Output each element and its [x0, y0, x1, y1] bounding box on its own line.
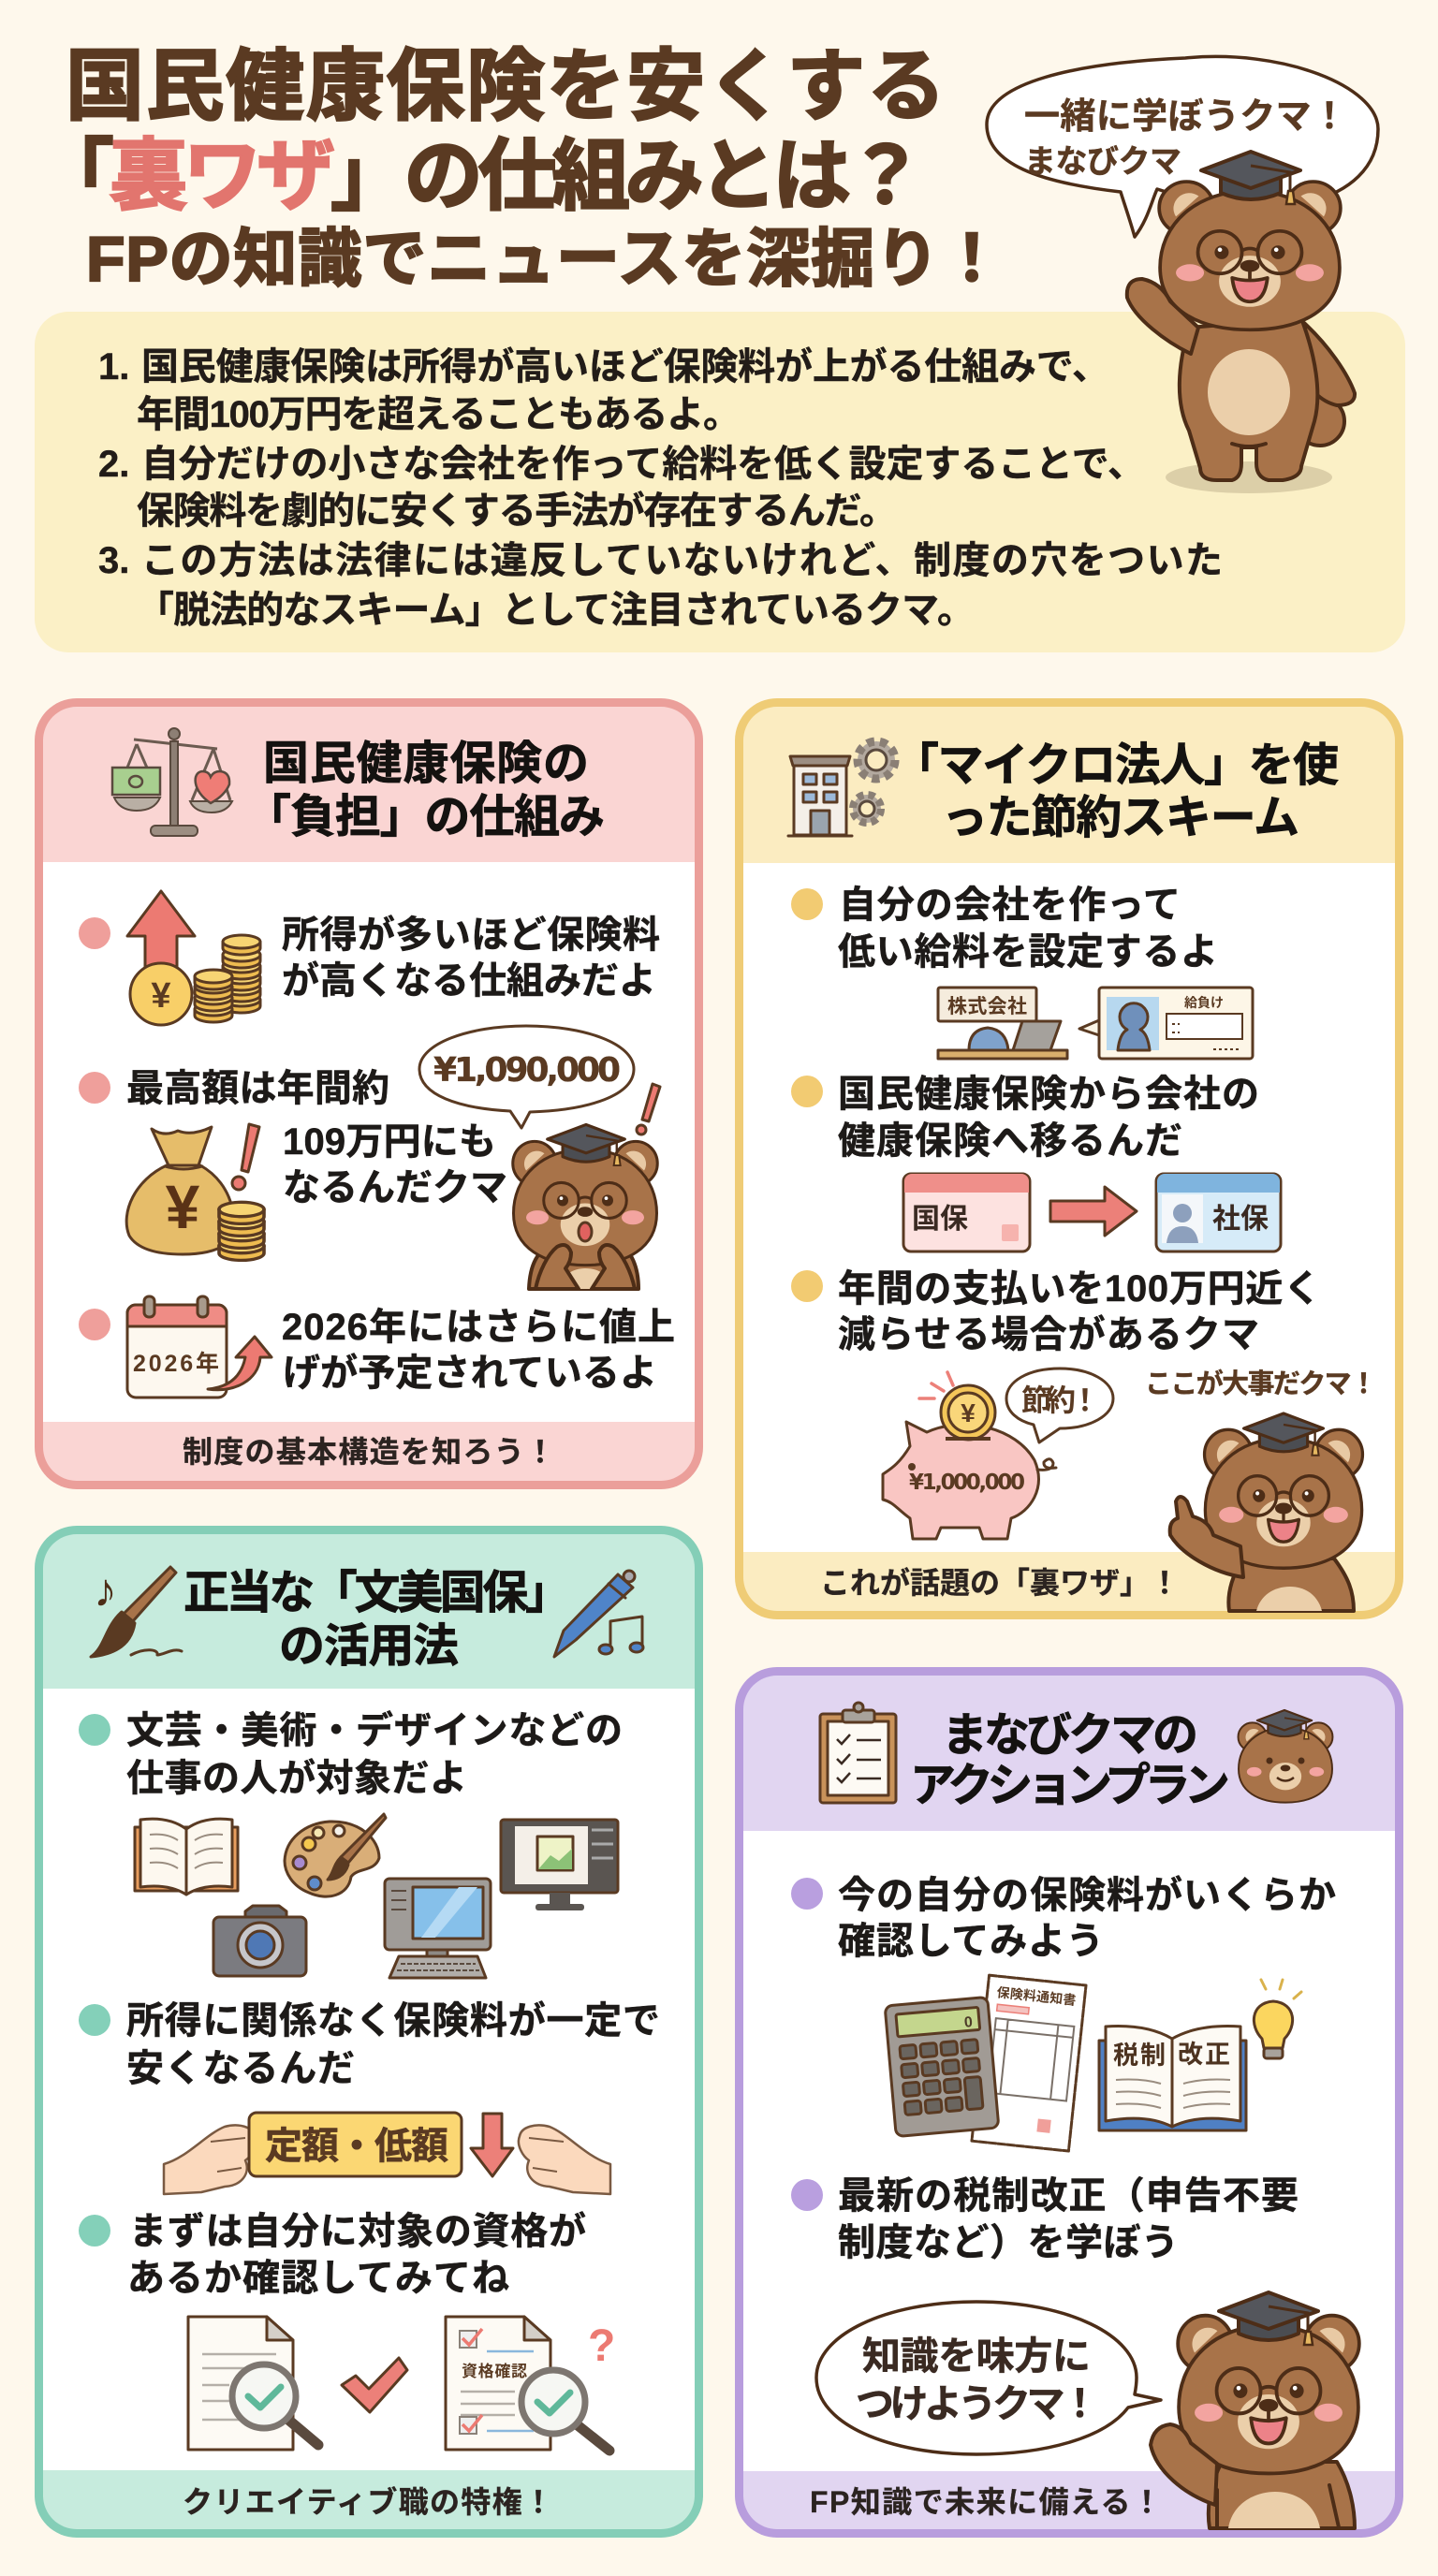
heading: まなびクマの [942, 1710, 1198, 1761]
mascot: surprised bear [513, 1124, 657, 1289]
icon: salary card: 給負け [1184, 995, 1224, 1010]
bullet 1: 今の自分の保険料がいくらか [838, 1875, 1336, 1916]
heading: 「負担」の仕組み [245, 792, 605, 842]
bullet 3: 年間の支払いを100万円近く [838, 1268, 1321, 1310]
speech bubble: ¥1,090,000 [419, 1026, 634, 1128]
icon: money bag: ¥ [166, 1172, 200, 1241]
summary box [35, 312, 1405, 652]
footer: クリエイティブ職の特権！ [183, 2485, 553, 2519]
icon: tax reform book [1099, 2027, 1246, 2130]
bullet 2 [791, 2175, 1299, 2263]
speech bubble: 知識を味方に: つけようクマ！ [856, 2382, 1099, 2425]
bullet 1: 所得が多いほど保険料 [282, 915, 660, 956]
bullet 3 [79, 1307, 675, 1394]
title: 「裏ワザ」の仕組みとは？ [36, 132, 925, 220]
bullet 3: げが予定されているよ [283, 1353, 657, 1394]
arrow [1050, 1187, 1137, 1236]
footer: 制度の基本構造を知ろう！ [183, 1435, 555, 1469]
icon: hands with sign: 定額・低額 [265, 2126, 448, 2167]
footer: FP知識で未来に備える！ [810, 2485, 1162, 2519]
icon: rising arrow and coins: ¥ [151, 976, 171, 1016]
bullet 3 [791, 1268, 1321, 1355]
icon: camera [213, 1906, 306, 1976]
heading: 正当な「文美国保」 [183, 1568, 571, 1618]
icon: light bulb [1254, 1980, 1301, 2058]
icon: music note and brush: ♪ [94, 1564, 117, 1617]
bullet 1: が高くなる仕組みだよ [282, 960, 656, 1002]
title [36, 42, 1004, 295]
panel: マイクロ法人 [735, 698, 1403, 1619]
icon: check mark [342, 2358, 407, 2412]
mascot: bear with speech [1151, 2292, 1359, 2528]
bullet 1: 自分の会社を作って [839, 885, 1181, 926]
bullet 1 [791, 885, 1218, 973]
bullet 2 [79, 1068, 507, 1208]
bullet 2: 所得に関係なく保険料が一定で [126, 2000, 660, 2042]
bullet 1: 文芸・美術・デザインなどの [126, 1709, 623, 1751]
panel: アクションプラン [735, 1667, 1403, 2538]
speech bubble: 知識を味方に: 知識を味方に [862, 2334, 1091, 2378]
summary list: 国民健康保険は所得が高いほど保険料が上がる仕組みで、 [141, 346, 1109, 388]
bullet 2: 制度など）を学ぼう [838, 2222, 1179, 2263]
icon: 社保 card [1156, 1174, 1281, 1251]
summary list: 「脱法的なスキーム」として注目されているクマ。 [137, 590, 975, 631]
icon: building and gears [788, 741, 895, 836]
icon: piggy bank: ¥1,000,000 [909, 1471, 1025, 1495]
icon: checklist with magnifier [446, 2317, 615, 2451]
icon: money bag [126, 1124, 264, 1260]
icon: checklist with magnifier: ? [588, 2321, 615, 2371]
mascot: waving bear [1127, 152, 1355, 493]
icon: 国保 card [903, 1174, 1030, 1251]
bullet 1: 確認してみよう [838, 1921, 1104, 1962]
icon: calendar 2026 [127, 1296, 271, 1398]
bullet 1 [79, 1709, 623, 1799]
icon: palette [285, 1814, 386, 1896]
icon: salary card [1079, 988, 1253, 1059]
title: FPの知識でニュースを深掘り！ [86, 224, 1004, 295]
bullet 1 [791, 1875, 1336, 1962]
bullet 2 [79, 2000, 660, 2089]
icon: pen and music notes [554, 1571, 643, 1657]
icon: 社保 card: 社保 [1212, 1204, 1269, 1235]
icon: tax reform book: 改正 [1178, 2041, 1230, 2069]
speech bubble: 節約: 節約！ [1021, 1383, 1100, 1417]
bullet 3: あるか確認してみてね [127, 2258, 509, 2299]
summary list [98, 346, 1223, 631]
heading: アクションプラン [910, 1761, 1230, 1811]
heading [183, 1568, 571, 1672]
bullet 2: なるんだクマ [283, 1167, 507, 1208]
icon: small bear head [1239, 1710, 1332, 1803]
summary list: 自分だけの小さな会社を作って給料を低く設定することで、 [141, 444, 1145, 485]
icon: document with magnifier [188, 2317, 318, 2450]
heading: った節約スキーム [942, 793, 1299, 843]
heading [245, 739, 605, 842]
title: 国民健康保険を安くする [66, 42, 946, 130]
panel: 文美国保 [35, 1526, 703, 2538]
icon: notice paper: 保険料通知書 [996, 1984, 1077, 2008]
icon: piggy bank [883, 1372, 1056, 1539]
bullet 2: 健康保険へ移るんだ [838, 1120, 1182, 1162]
heading: 「マイクロ法人」を使 [893, 740, 1339, 791]
bullet 2 [791, 1074, 1259, 1162]
summary list: 年間100万円を超えることもあるよ。 [137, 394, 741, 435]
icon: design monitor [501, 1820, 618, 1910]
speech bubble: 節約 [1006, 1368, 1113, 1442]
icon: hands with sign [164, 2113, 610, 2194]
icon: calculator [885, 1997, 999, 2137]
footer: これが話題の「裏ワザ」！ [820, 1566, 1180, 1600]
icon: desktop computer [385, 1879, 491, 1978]
speech bubble: 知識を味方に [816, 2302, 1161, 2454]
summary list: 2. [98, 444, 129, 485]
bullet 2: 最高額は年間約 [126, 1068, 389, 1109]
icon: open book [135, 1819, 238, 1895]
icon: clipboard [820, 1703, 896, 1803]
speech bubble: ¥1,090,000: ¥1,090,000 [433, 1051, 621, 1090]
heading [910, 1710, 1230, 1811]
mascot caption: ここが大事だクマ！ [1145, 1368, 1377, 1399]
icon: checklist with magnifier: 資格確認 [462, 2363, 527, 2380]
icon: office desk [938, 988, 1067, 1059]
summary list: 3. [98, 540, 129, 581]
icon: calendar 2026: 2026年 [133, 1351, 219, 1377]
panel: 国民健康保険の負担 [35, 698, 703, 1489]
summary list: 保険料を劇的に安くする手法が存在するんだ。 [137, 490, 897, 532]
heading: 国民健康保険の [263, 739, 589, 789]
bullet 2: 最新の税制改正（申告不要 [838, 2175, 1299, 2217]
icon: music note and brush [91, 1564, 182, 1657]
heading: の活用法 [279, 1621, 459, 1672]
mascot: pointing bear [1170, 1413, 1362, 1611]
icon: 国保 card: 国保 [912, 1204, 968, 1235]
icon: balance scale [112, 728, 232, 836]
speech bubble: 一緒に学ぼうクマ: まなびクマ [1024, 144, 1181, 180]
icon: piggy bank: ¥ [961, 1398, 976, 1427]
bullet 3: まずは自分に対象の資格が [129, 2211, 586, 2252]
summary list: 1. [98, 346, 129, 388]
icon: calculator: 0 [963, 2014, 974, 2031]
bullet 2: 国民健康保険から会社の [838, 1074, 1259, 1115]
icon: office desk: 株式会社 [947, 996, 1027, 1017]
bullet 2: 安くなるんだ [126, 2048, 355, 2089]
speech bubble: 一緒に学ぼうクマ [987, 56, 1378, 237]
bullet 3 [79, 2211, 586, 2299]
icon: tax reform book: 税制 [1113, 2042, 1166, 2070]
summary list: この方法は法律には違反していないけれど、制度の穴をついた [141, 540, 1223, 581]
bullet 2: 109万円にも [283, 1121, 496, 1163]
icon: notice paper [972, 1975, 1086, 2151]
bullet 1: 仕事の人が対象だよ [126, 1758, 467, 1799]
bullet 3: 2026年にはさらに値上 [282, 1307, 675, 1348]
bullet 1: 低い給料を設定するよ [838, 931, 1218, 973]
speech bubble: 一緒に学ぼうクマ: 一緒に学ぼうクマ！ [1024, 97, 1347, 137]
icon: rising arrow and coins [127, 891, 260, 1025]
heading [893, 740, 1339, 843]
icon: exclamation [637, 1084, 660, 1134]
bullet 1 [79, 915, 660, 1002]
bullet 3: 減らせる場合があるクマ [838, 1314, 1259, 1355]
